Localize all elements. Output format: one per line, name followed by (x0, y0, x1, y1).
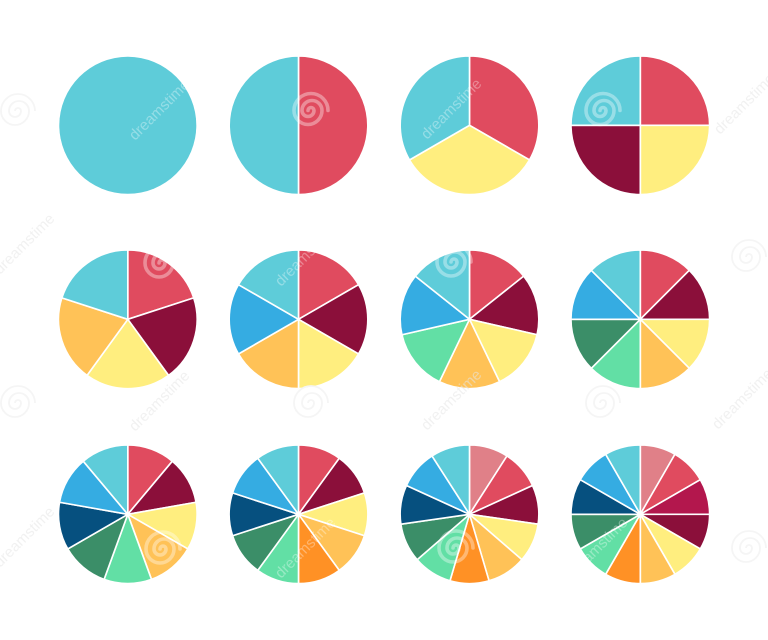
pie: 8 segments (557, 236, 724, 403)
pie: 7 segments (390, 234, 557, 405)
watermark: text over pies: dreamstime (564, 514, 631, 582)
pie: 2 segments (229, 56, 368, 195)
watermark: spirals over pies (145, 94, 620, 563)
pie: 11 segments (393, 436, 548, 591)
pie: 10 segments (220, 434, 377, 594)
watermark: faint text on background: dreamstime (418, 366, 485, 434)
watermark: faint spirals on background (1, 94, 766, 562)
watermark: faint text on background (0, 70, 768, 571)
watermark: text over pies: dreamstime (418, 75, 485, 143)
watermark: text over pies: dreamstime (126, 76, 193, 144)
watermark: text over pies: dreamstime (272, 514, 339, 582)
watermark: text over pies: dreamstime (272, 222, 339, 290)
watermark: text over pies (126, 75, 631, 582)
watermark: faint text on background: dreamstime (126, 367, 193, 435)
pie: 12 segments (563, 437, 718, 592)
pie: 3 segments (375, 48, 539, 220)
pie: 5 segments (34, 235, 214, 414)
pie: 4 segments (571, 56, 710, 195)
pie: 6 segments (208, 233, 389, 406)
pie: 1 segment (59, 57, 196, 194)
pie: 9 segments (45, 433, 206, 595)
